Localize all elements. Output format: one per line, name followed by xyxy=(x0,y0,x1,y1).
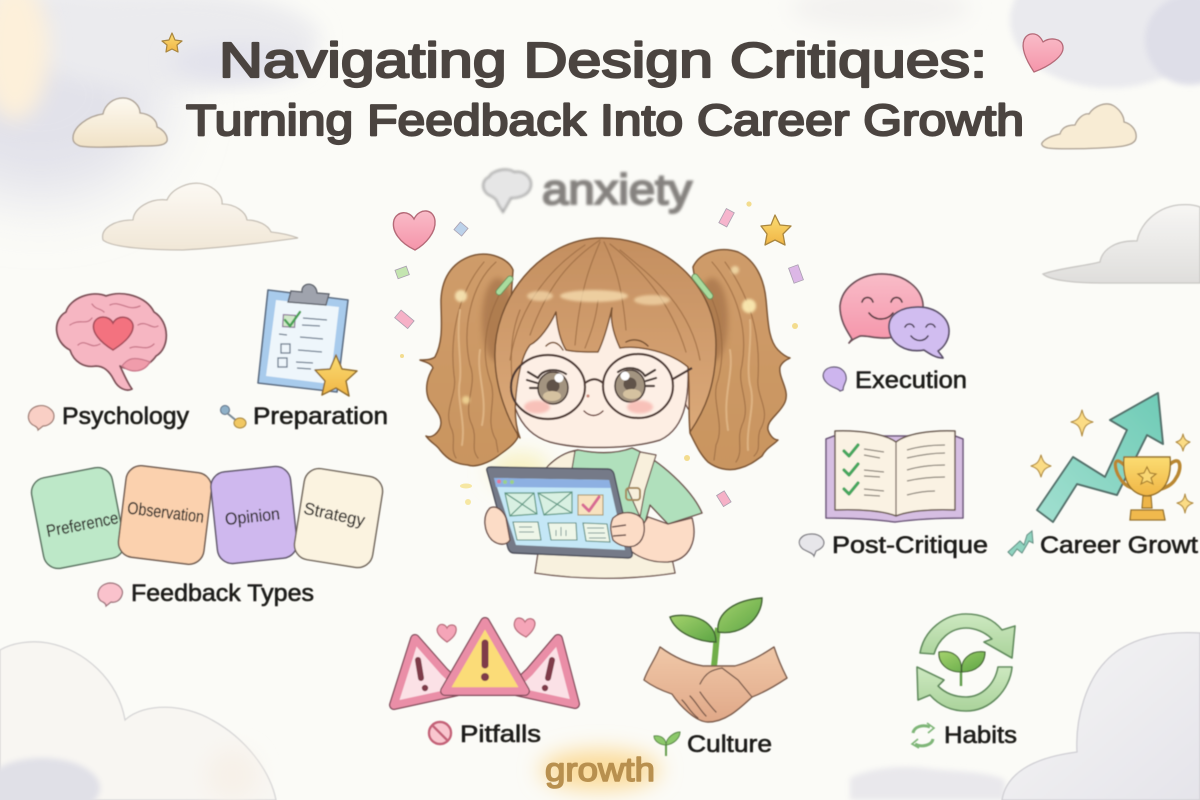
icon: star xyxy=(761,215,791,245)
cloud: tan title left xyxy=(73,98,167,147)
icon: recycle arrows xyxy=(917,614,1015,711)
label: post-critique: Post-Critique xyxy=(832,532,988,559)
card: preference xyxy=(29,465,127,571)
icon: label bubble xyxy=(799,534,824,556)
face xyxy=(509,304,688,447)
panel: feedback types xyxy=(29,464,385,607)
overall straps xyxy=(546,451,656,517)
icon: handshake xyxy=(644,647,787,722)
icon: heart xyxy=(393,211,435,250)
card: observation: Observation xyxy=(126,498,205,527)
icon: heart xyxy=(93,317,133,350)
card: opinion xyxy=(209,465,299,565)
cloud: bottom right xyxy=(850,633,1200,800)
icon: growth arrow xyxy=(1037,393,1163,522)
tablet glow xyxy=(490,452,550,488)
glasses xyxy=(511,354,692,419)
icon: label bubble xyxy=(98,583,122,606)
item: post-critique xyxy=(799,431,988,559)
icon: label bubble xyxy=(823,367,846,391)
icon: sparkles xyxy=(1031,410,1193,513)
icon: small arrow xyxy=(1008,531,1033,556)
item: execution xyxy=(823,274,967,394)
card: opinion: Opinion xyxy=(224,504,281,529)
icon: small key xyxy=(220,406,246,428)
anxiety text: anxiety xyxy=(542,166,693,214)
item: culture xyxy=(644,598,787,758)
label: preparation: Preparation xyxy=(253,403,388,430)
icon: thought cloud xyxy=(483,170,531,212)
cloud: cream upper left xyxy=(103,183,298,250)
right pigtail xyxy=(690,250,790,470)
card: observation xyxy=(117,464,213,566)
item: pitfalls xyxy=(394,618,575,748)
growth text: growth xyxy=(545,751,655,788)
hair highlights xyxy=(510,240,700,380)
nose and mouth xyxy=(584,394,603,416)
icon: star xyxy=(315,355,357,396)
pigtail shading and strands xyxy=(449,262,765,462)
arm xyxy=(628,517,694,562)
icon: brain with heart xyxy=(57,294,166,390)
card: preference: Preference xyxy=(45,508,120,541)
item: habits xyxy=(912,614,1017,749)
icon: center warning triangle xyxy=(445,622,525,691)
label: execution: Execution xyxy=(855,367,967,394)
item: career growth xyxy=(1008,393,1198,559)
label: habits: Habits xyxy=(944,722,1017,749)
hair cap and bangs xyxy=(495,238,716,438)
decorations around character xyxy=(393,201,803,507)
icon: small sprout xyxy=(654,732,680,756)
ear xyxy=(683,368,705,412)
icon: clipboard xyxy=(258,284,348,392)
cloud: tan title right xyxy=(1042,104,1136,149)
eyes xyxy=(527,368,656,404)
overalls xyxy=(535,540,675,578)
icon: title heart xyxy=(1023,34,1063,72)
title: Turning Feedback Into Career Growth xyxy=(186,96,1024,145)
icon: trophy xyxy=(1115,457,1180,520)
label: culture: Culture xyxy=(687,731,772,758)
label: psychology: Psychology xyxy=(62,403,189,430)
growth glow xyxy=(540,750,660,790)
icon: purple speech bubble xyxy=(889,307,949,358)
icon: small recycle xyxy=(912,723,934,748)
growth word xyxy=(540,750,660,790)
shirt xyxy=(540,448,702,540)
icon: open book xyxy=(826,431,963,522)
item: psychology xyxy=(28,294,189,430)
icon: hearts xyxy=(437,618,535,642)
cloud: bottom left xyxy=(0,642,276,800)
icon: label bubble xyxy=(28,406,54,430)
label: feedback types: Feedback Types xyxy=(131,580,314,607)
item: preparation xyxy=(220,284,388,430)
confetti xyxy=(395,201,803,507)
icon: right warning triangle xyxy=(511,639,575,704)
hair ties xyxy=(499,277,710,296)
character: girl with tablet xyxy=(420,238,790,578)
label: pitfalls: Pitfalls xyxy=(460,721,541,748)
title xyxy=(186,34,1024,145)
tablet xyxy=(487,467,632,558)
hands xyxy=(485,507,644,547)
cloud: gray right xyxy=(1043,205,1200,283)
icon: pink speech bubble xyxy=(840,274,923,343)
icon: left warning triangle xyxy=(394,639,463,705)
icon: sprout xyxy=(939,652,985,686)
anxiety word xyxy=(483,166,693,214)
icon: sprout xyxy=(670,598,762,666)
card: strategy xyxy=(292,466,385,570)
icon: prohibited xyxy=(429,722,451,744)
blush xyxy=(524,400,550,414)
buckle xyxy=(626,488,640,500)
left pigtail xyxy=(420,254,518,466)
title: Navigating Design Critiques: xyxy=(219,34,987,88)
card: strategy: Strategy xyxy=(302,499,367,530)
eyebrows xyxy=(546,343,563,350)
label: career growth: Career Growt xyxy=(1040,532,1198,559)
icon: title star xyxy=(162,33,182,52)
